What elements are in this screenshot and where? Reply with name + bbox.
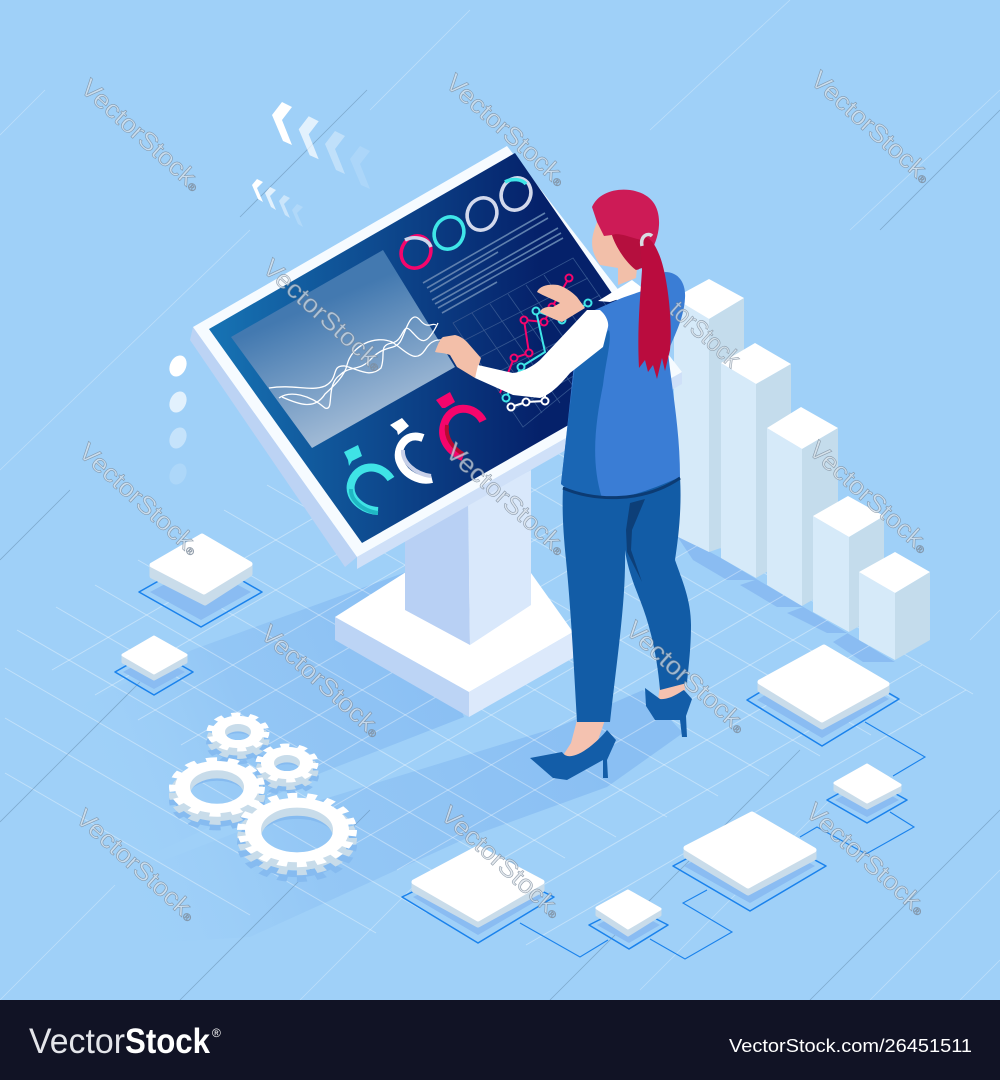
- line chart grid: [453, 258, 630, 427]
- gears: [173, 714, 352, 879]
- front shoe: [530, 720, 616, 780]
- chevron arrows: small: [252, 179, 303, 227]
- chip: bottom right large: [673, 814, 826, 911]
- footer logo: Vector: [29, 1022, 125, 1061]
- gear 2: [258, 745, 316, 793]
- watermarks: VectorStock®: [805, 66, 938, 189]
- gear 4: [242, 796, 352, 879]
- line chart: white series: [508, 395, 548, 410]
- footer logo: ®: [212, 1026, 221, 1040]
- watermarks: VectorStock®: [800, 798, 933, 921]
- circuit connectors: [520, 722, 925, 959]
- ponytail: [638, 237, 671, 379]
- footer logo: [29, 1022, 221, 1061]
- hair tie: [642, 234, 652, 246]
- gauge: white: [390, 418, 432, 480]
- chip: left small: [115, 637, 193, 695]
- watermarks: VectorStock®: [620, 616, 753, 739]
- sleeve: [475, 310, 608, 398]
- chevron arrows: large: [272, 102, 370, 189]
- trousers: [563, 477, 691, 722]
- rear shoe: [645, 683, 692, 737]
- face and neck: [592, 222, 640, 285]
- jacket shade: [561, 330, 610, 498]
- chip: bottom centre small: [589, 891, 668, 949]
- far hand: [537, 285, 585, 322]
- chip: left large: [139, 536, 262, 627]
- gauge: cyan: [344, 445, 391, 513]
- watermarks: VectorStock®: [440, 438, 573, 561]
- chip: right small: [827, 765, 907, 823]
- bar chart: isometric columns: [674, 279, 930, 660]
- watermarks: VectorStock®: [75, 74, 208, 197]
- watermarks: VectorStock®: [73, 438, 206, 561]
- dots column: [166, 353, 190, 487]
- watermarks: VectorStock®: [440, 69, 573, 192]
- progress rings: [396, 173, 536, 273]
- trouser shade: [626, 499, 645, 582]
- woman at the screen: [435, 190, 692, 780]
- chip: bottom centre large: [402, 848, 554, 943]
- gauge: red: [436, 392, 483, 457]
- kiosk stand: [335, 470, 573, 717]
- hair shade: [612, 234, 642, 270]
- watermarks: VectorStock®: [435, 801, 568, 924]
- text lines on screen: [423, 213, 563, 313]
- gear 1: [209, 714, 267, 762]
- hair: [592, 190, 659, 270]
- gear 3: [173, 760, 261, 828]
- footer bar: [0, 1000, 1000, 1080]
- chip: right large: [747, 647, 899, 746]
- watermarks: [70, 66, 938, 927]
- watermarks: VectorStock®: [255, 620, 388, 743]
- footer logo: Stock: [125, 1022, 210, 1061]
- watermarks: VectorStock®: [70, 804, 203, 927]
- floor shadows: [0, 533, 895, 945]
- footer image id: VectorStock.com/26451511: [729, 1035, 972, 1056]
- watermarks: VectorStock®: [803, 436, 936, 559]
- near hand: [435, 335, 481, 378]
- line chart: cyan series: [502, 300, 592, 402]
- line chart: red series: [500, 274, 572, 393]
- collar: [598, 280, 645, 302]
- floor grid: [5, 385, 973, 945]
- watermarks: VectorStock®: [257, 254, 390, 377]
- kiosk touch screen: [190, 146, 682, 569]
- jacket: [561, 272, 685, 498]
- waistband: [563, 478, 680, 498]
- watermarks: torStock: [664, 296, 746, 374]
- chart panel: [231, 250, 455, 448]
